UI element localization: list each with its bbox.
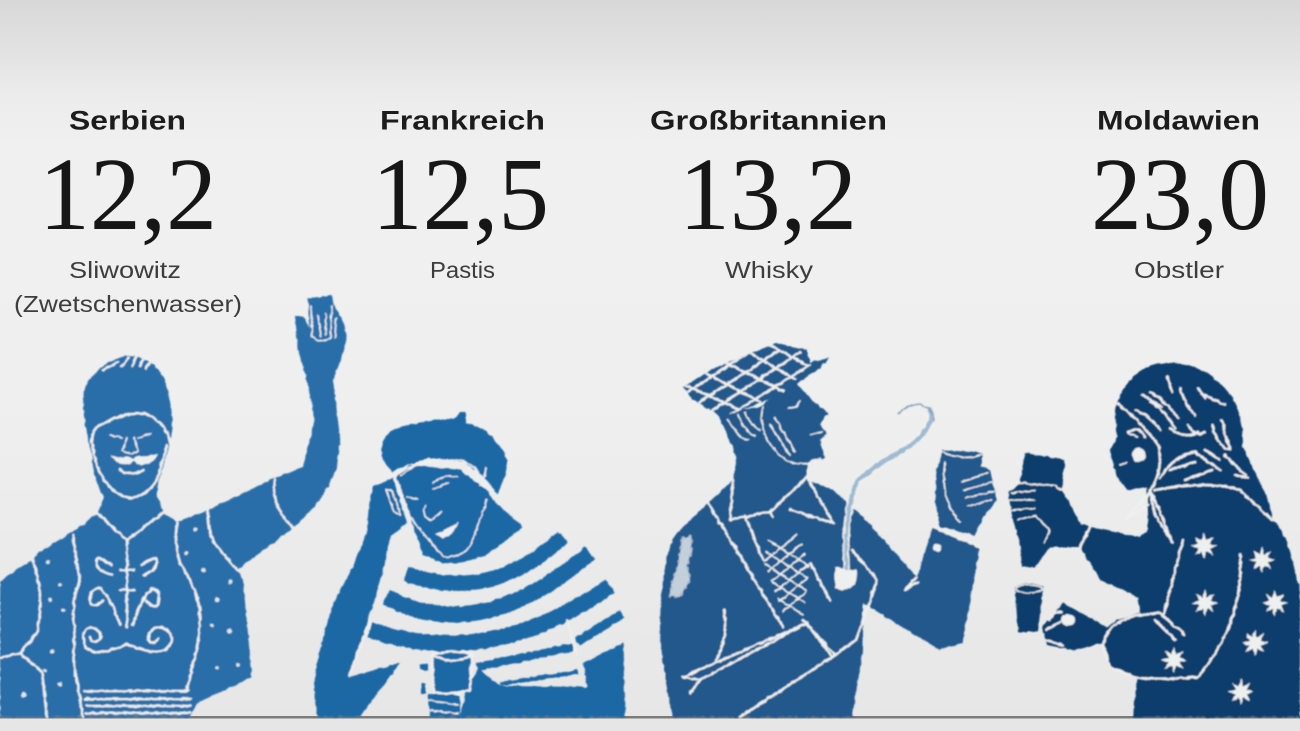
flat cap	[683, 343, 830, 417]
value: 12,5: 12,5	[372, 137, 549, 252]
jacket and head silhouette	[660, 380, 980, 717]
arm crease	[349, 620, 370, 676]
heading: Moldawien: Moldawien	[1097, 106, 1260, 136]
torso and glass	[420, 620, 625, 717]
column: Moldawien text	[1091, 106, 1269, 283]
coat seams and lower hand	[1016, 540, 1240, 679]
label: Sliwowitz: Sliwowitz	[69, 257, 181, 283]
label: Zwetschenwasser: (Zwetschenwasser)	[14, 291, 242, 317]
figure: French man with beret	[314, 412, 625, 717]
label: Whisky: Whisky	[725, 257, 814, 283]
vest dots	[22, 528, 240, 698]
value: 13,2: 13,2	[679, 137, 857, 252]
figure: Moldovan woman pouring from a bottle	[1008, 363, 1300, 717]
jacket lines and forearm	[683, 503, 980, 717]
face, beard and hair lines	[728, 401, 822, 464]
headscarf lines	[1118, 377, 1272, 542]
collar and tie	[730, 477, 833, 632]
vest and sleeve seams	[0, 480, 293, 717]
face details	[1120, 433, 1146, 465]
hair highlights	[103, 357, 150, 370]
bottle and hand lines	[1010, 483, 1090, 547]
arm and hand	[314, 478, 407, 717]
heading: Serbien: Serbien	[69, 106, 186, 136]
figure: British man with pipe and tumbler	[660, 343, 997, 717]
face lines	[92, 414, 170, 540]
column: Frankreich text	[372, 106, 549, 283]
striped shirt	[370, 537, 622, 684]
shirt embroidery	[83, 540, 172, 652]
coat stars	[1161, 533, 1288, 705]
pipe and smoke	[835, 404, 934, 590]
cup	[1015, 584, 1043, 632]
head, neck and beret	[382, 412, 523, 563]
worn print speckle on shoulder	[670, 536, 692, 597]
heading: Frankreich: Frankreich	[380, 106, 545, 136]
column: Großbritannien text	[650, 106, 887, 283]
value: 12,2: 12,2	[39, 137, 217, 252]
baseline rule	[0, 716, 1300, 718]
label: Pastis: Pastis	[430, 257, 495, 283]
label: Obstler: Obstler	[1134, 257, 1224, 283]
heading: Großbritannien: Großbritannien	[650, 106, 887, 136]
figure: Serbian man raising a glass	[0, 296, 347, 717]
column: Serbien text	[14, 106, 242, 317]
raised hand and tumbler	[935, 450, 997, 535]
hand and glass details	[311, 306, 336, 341]
value: 23,0: 23,0	[1091, 137, 1269, 252]
